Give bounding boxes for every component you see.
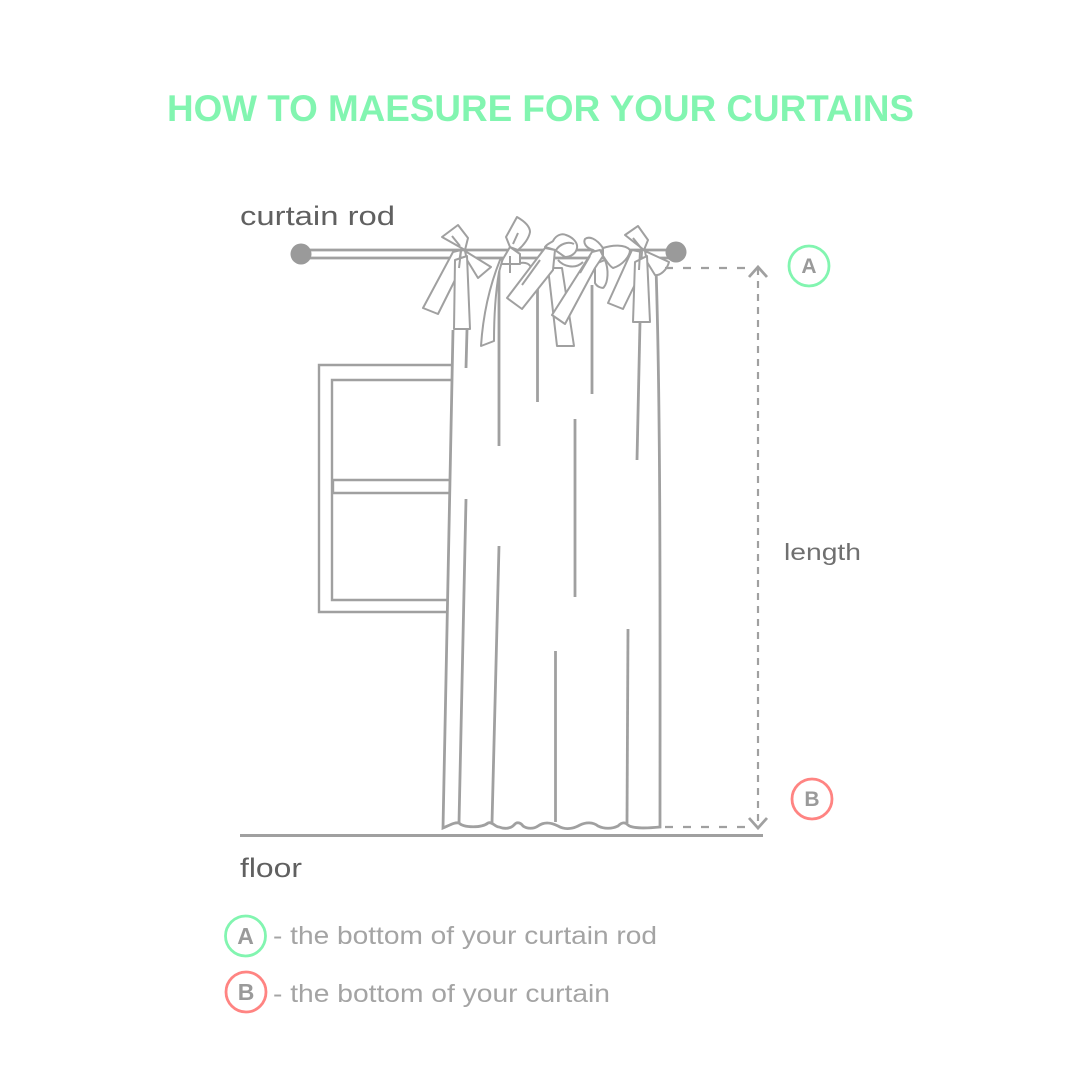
- bow 1: [423, 225, 491, 329]
- bow 3: [507, 234, 583, 346]
- curtain rod: [290, 242, 686, 264]
- marker B: B: [804, 788, 820, 811]
- marker B: [792, 779, 832, 819]
- label: length: length: [784, 539, 861, 565]
- legend row B: B: [238, 979, 254, 1005]
- marker A: A: [801, 255, 817, 278]
- label: curtain rod: curtain rod: [240, 201, 395, 231]
- bow 5: [608, 226, 669, 322]
- legend row A: - the bottom of your curtain rod: [273, 922, 657, 950]
- bow 4: [552, 238, 630, 324]
- window: [319, 365, 453, 612]
- legend row B: - the bottom of your curtain: [273, 980, 610, 1008]
- legend row A: [226, 916, 657, 956]
- legend row A: A: [237, 923, 254, 949]
- floor line: [240, 834, 763, 837]
- bow 2: [481, 217, 531, 346]
- bow ties: [423, 217, 669, 346]
- label: floor: floor: [240, 853, 302, 883]
- dimension arrow: length: [665, 267, 767, 828]
- marker A: [789, 246, 829, 286]
- legend row B: [226, 972, 610, 1012]
- title: HOW TO MAESURE FOR YOUR CURTAINS: [167, 88, 914, 129]
- curtain panel: [443, 265, 660, 829]
